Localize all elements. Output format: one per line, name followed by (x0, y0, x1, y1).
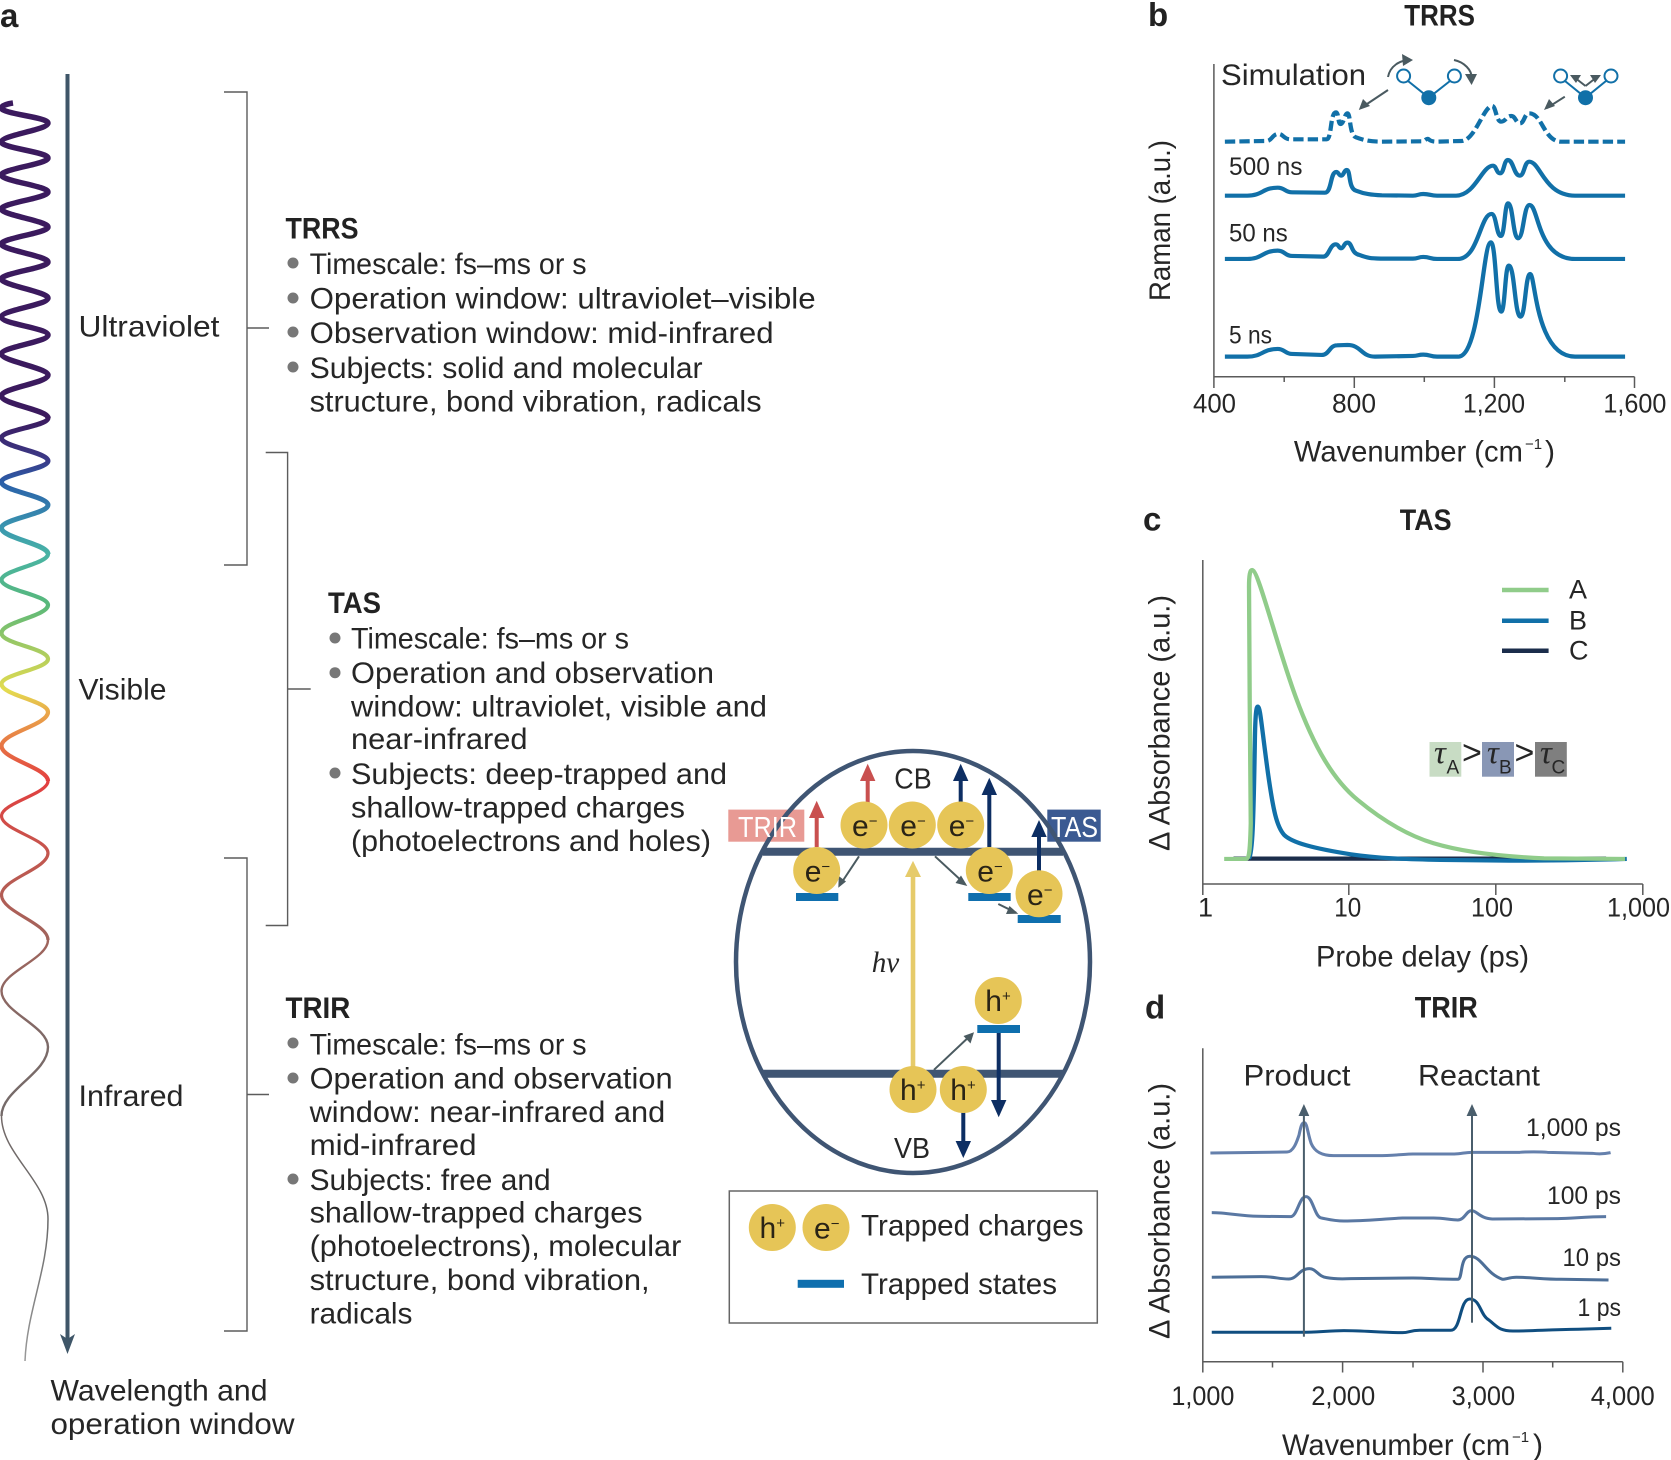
bracket: TAS range (266, 452, 311, 926)
text block: TAS: Subjects: deep-trapped and (351, 758, 727, 791)
legend: trapped charges and states: Trapped states (861, 1268, 1057, 1301)
callout: lifetime ordering: > (1462, 734, 1482, 772)
text block: TAS: Timescale: fs–ms or s (351, 622, 629, 655)
legend: curves A, B, C: B (1569, 605, 1587, 635)
x axis title: Wavenumber (cm (1294, 436, 1523, 469)
callout: lifetime ordering (1430, 734, 1567, 778)
axis label: wavelength and operation window: operation window (50, 1408, 295, 1441)
text block: TRRS (286, 212, 816, 418)
electrons (793, 802, 1062, 917)
text block: TAS: (photoelectrons and holes) (351, 825, 711, 858)
x axis title: −1 (1525, 436, 1542, 453)
legend: trapped charges and states (729, 1191, 1097, 1323)
arrow: wavelength axis (60, 74, 75, 1354)
electrons: − (965, 813, 974, 830)
x tick labels: 1,200 (1463, 389, 1525, 419)
electrons: − (869, 813, 878, 830)
label: 100 ps: 100 ps (1547, 1182, 1621, 1210)
bracket: TRIR range (224, 858, 269, 1331)
electrons: e (805, 856, 821, 888)
text block: TRRS: Operation window: ultraviolet–visible (310, 283, 816, 316)
axis label: wavelength and operation window (50, 1374, 295, 1441)
arrows: TAS probes (953, 764, 1047, 1158)
label: 50 ns: 50 ns (1229, 220, 1288, 248)
label: Ultraviolet: Ultraviolet (78, 310, 220, 344)
text block: TRRS: Timescale: fs–ms or s (310, 248, 587, 281)
x tick labels: 1 (1198, 893, 1213, 923)
text block: TRIR (286, 992, 681, 1331)
arrow: product growth (1298, 1104, 1309, 1337)
title: TRRS: TRRS (1404, 0, 1475, 32)
text block: TRIR: (photoelectrons), molecular (310, 1230, 681, 1263)
particle outline (736, 751, 1090, 1173)
label: 1 ps: 1 ps (1578, 1294, 1621, 1322)
holes: + (967, 1077, 976, 1094)
label: Visible: Visible (78, 674, 166, 707)
label: CB: CB (894, 764, 932, 796)
x tick labels: 1,600 (1603, 389, 1666, 419)
x axis title: −1 (1512, 1429, 1529, 1446)
arrows: TRIR probes (809, 764, 875, 847)
label: 10 ps: 10 ps (1562, 1244, 1621, 1272)
diagram: band structure (728, 751, 1101, 1173)
label: 500 ns: 500 ns (1229, 153, 1302, 181)
legend: trapped charges and states: e (814, 1212, 831, 1246)
arrow: reactant decay (1467, 1104, 1477, 1323)
kinetic curves (1224, 570, 1627, 861)
legend: trapped charges and states: h (760, 1212, 776, 1245)
text block: TRRS: structure, bond vibration, radicals (310, 386, 762, 418)
electrons: e (1027, 879, 1044, 912)
x tick labels (1198, 893, 1670, 923)
panel c: TAS kinetics (1143, 501, 1670, 974)
axes (1214, 64, 1634, 388)
electrons: e (949, 810, 965, 843)
holes: h (950, 1074, 967, 1107)
arrow: excitation (905, 861, 921, 1067)
callout: lifetime ordering: τ (1540, 735, 1553, 771)
text block: TAS: shallow-trapped charges (351, 792, 685, 824)
holes: + (1002, 988, 1011, 1005)
trapped state bars (796, 893, 1061, 1033)
x axis title: ) (1545, 436, 1555, 469)
x tick labels: 400 (1193, 389, 1236, 419)
x tick labels: 100 (1471, 893, 1513, 923)
electrons: − (821, 858, 830, 876)
tag text: TRIR: TRIR (738, 812, 797, 844)
label: 5 ns: 5 ns (1229, 321, 1272, 349)
valence band line (763, 1070, 1063, 1078)
electrons: − (1044, 882, 1053, 899)
panel label d: d (1145, 988, 1165, 1025)
label: Simulation: Simulation (1221, 59, 1366, 92)
x tick labels (1193, 389, 1666, 419)
tag text: TAS: TAS (1051, 812, 1098, 844)
tag: TRIR (728, 810, 804, 842)
electrons: − (917, 813, 926, 830)
callout: lifetime ordering: τ (1434, 735, 1447, 771)
label: Reactant: Reactant (1418, 1060, 1541, 1092)
y axis title: Raman (a.u.) (1144, 140, 1177, 301)
legend: trapped charges and states: Trapped charges (861, 1210, 1084, 1242)
electrons: − (994, 858, 1003, 876)
text block: TRIR: mid-infrared (310, 1129, 477, 1162)
x tick labels (1171, 1381, 1655, 1411)
text block: TRIR: Timescale: fs–ms or s (310, 1028, 587, 1062)
title: TRIR: TRIR (1415, 992, 1478, 1024)
bracket: TRRS range (224, 92, 269, 565)
text block: TRIR: structure, bond vibration, (310, 1264, 650, 1297)
label: Product: Product (1244, 1060, 1351, 1092)
title: TAS: TAS (1400, 504, 1452, 537)
electrons: e (852, 810, 869, 843)
text block: TRIR: TRIR (286, 992, 351, 1025)
text block: TAS: near-infrared (351, 723, 528, 756)
legend: trapped charges and states: − (831, 1216, 840, 1232)
text block: TRRS: Observation window: mid-infrared (310, 317, 774, 350)
text block: TRRS: TRRS (286, 212, 358, 246)
label: VB: VB (894, 1133, 930, 1165)
x tick labels: 10 (1334, 893, 1361, 923)
label: photon energy: hν (872, 946, 900, 979)
callout: lifetime ordering: C (1552, 758, 1565, 778)
holes: h (900, 1074, 917, 1107)
text block: TAS: TAS (328, 587, 381, 620)
electrons: e (977, 856, 994, 888)
legend: curves A, B, C: C (1569, 635, 1588, 665)
spectra curves (1225, 106, 1625, 357)
x axis title: Probe delay (ps) (1316, 941, 1529, 974)
icon: stretching mode molecule (1544, 70, 1618, 110)
x tick labels: 1,000 (1171, 1381, 1234, 1411)
axes (1203, 560, 1643, 895)
holes: h (985, 985, 1002, 1018)
x tick labels: 800 (1332, 389, 1376, 419)
callout: lifetime ordering: τ (1487, 735, 1500, 771)
text block: TRIR: window: near-infrared and (309, 1096, 665, 1129)
callout: lifetime ordering: > (1514, 734, 1534, 772)
text block: TRIR: Subjects: free and (310, 1164, 551, 1197)
legend: curves A, B, C: A (1569, 574, 1587, 604)
relaxation arrows (838, 856, 1018, 1070)
axes (1203, 1048, 1623, 1372)
text block: TRIR: shallow-trapped charges (310, 1196, 643, 1230)
label: 1,000 ps: 1,000 ps (1526, 1114, 1621, 1142)
y axis title: Δ Absorbance (a.u.) (1144, 1083, 1177, 1339)
legend: curves A, B, C (1502, 574, 1588, 665)
conduction band line (763, 848, 1063, 856)
panel d: TRIR spectra (1144, 988, 1655, 1460)
holes: + (917, 1077, 926, 1094)
icon: electromagnetic wave (2, 103, 48, 1361)
panel a: wavelength and technique windows (0, 0, 1101, 1441)
text block: TAS: Operation and observation (351, 657, 714, 690)
x tick labels: 2,000 (1311, 1381, 1375, 1411)
icon: bending mode molecule (1359, 54, 1477, 110)
electrons: e (900, 810, 917, 843)
legend: trapped charges and states: + (776, 1215, 785, 1232)
y axis title: Δ Absorbance (a.u.) (1144, 595, 1177, 851)
text block: TRIR: radicals (310, 1298, 412, 1331)
text block: TAS: window: ultraviolet, visible and (350, 690, 767, 724)
text block: TRRS: Subjects: solid and molecular (310, 352, 703, 385)
callout: lifetime ordering: B (1499, 758, 1512, 778)
holes (890, 977, 1022, 1113)
tag: TAS (1047, 810, 1101, 842)
panel b: TRRS spectra (1144, 0, 1666, 469)
callout: lifetime ordering: A (1446, 758, 1460, 778)
panel label c: c (1143, 501, 1161, 538)
x tick labels: 4,000 (1591, 1381, 1655, 1411)
axis label: wavelength and operation window: Wavelength and (50, 1374, 268, 1408)
x tick labels: 3,000 (1452, 1381, 1515, 1411)
label: Infrared: Infrared (78, 1080, 184, 1113)
text block: TAS (328, 587, 767, 858)
spectra curves (1210, 1123, 1611, 1333)
text block: TRIR: Operation and observation (310, 1062, 673, 1095)
